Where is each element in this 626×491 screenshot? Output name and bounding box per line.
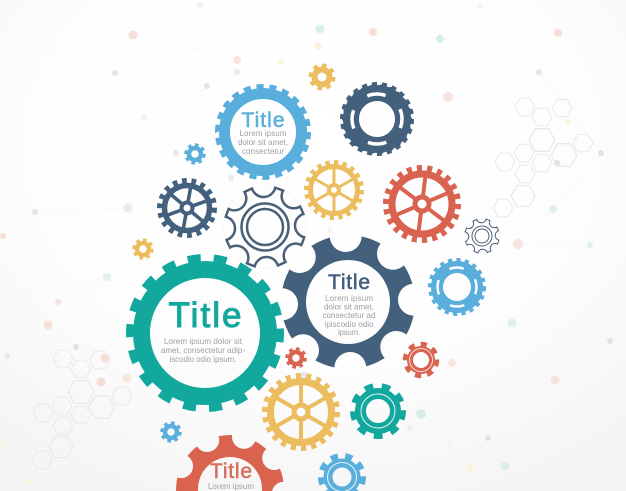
text: navy gear: consectetur ad bbox=[322, 311, 376, 320]
text: blue gear bbox=[238, 129, 288, 156]
text: navy gear: ipiscodio odio bbox=[324, 320, 374, 329]
gear: navy title bbox=[281, 235, 415, 369]
gear: blue slotted right bbox=[430, 260, 484, 314]
text: navy gear bbox=[322, 294, 376, 337]
gear: blue tiny bottom bbox=[162, 423, 180, 441]
text: navy gear: ipsum. bbox=[338, 328, 360, 337]
gear: red small right bbox=[405, 344, 437, 376]
gear: yellow tiny top bbox=[310, 66, 334, 88]
gear: yellow spoked bottom bbox=[266, 376, 336, 448]
text: navy gear: dolor sit amet, bbox=[324, 302, 374, 312]
gear: teal title bbox=[130, 258, 280, 408]
gear: blue title bbox=[218, 86, 308, 178]
text: navy gear: Lorem ipsum bbox=[325, 294, 373, 303]
gear: navy spoked bbox=[160, 181, 214, 235]
text: blue gear: consectetur bbox=[242, 147, 284, 156]
text: blue gear: Lorem ipsum bbox=[240, 129, 287, 138]
hexagon cluster right bbox=[493, 98, 593, 217]
title: navy gear: Title bbox=[328, 271, 370, 294]
gear: teal small bbox=[353, 386, 403, 436]
text: teal gear: amet, consectetur adip- bbox=[161, 346, 245, 355]
gear: blue bottom bbox=[321, 456, 363, 491]
title: red gear: Title bbox=[210, 460, 252, 483]
gear: outline large bbox=[223, 185, 307, 269]
gear: red spoked bbox=[386, 168, 458, 240]
text: red gear: Lorem ipsum bbox=[208, 482, 254, 491]
gear: red tiny bbox=[287, 349, 305, 367]
title: blue gear: Title bbox=[242, 109, 284, 132]
gear: yellow tiny left bbox=[134, 240, 152, 258]
gear: blue tiny bbox=[186, 145, 204, 163]
text: teal gear: iscodio odio ipsum. bbox=[170, 355, 236, 364]
text: blue gear: dolor sit amet, bbox=[238, 138, 288, 147]
title: teal gear: Title bbox=[168, 296, 242, 335]
text: teal gear: Lorem ipsum dolor sit bbox=[164, 337, 243, 346]
text: teal gear bbox=[161, 337, 245, 364]
gear: yellow spoked top bbox=[306, 162, 362, 218]
white slots bbox=[352, 94, 402, 144]
hexagon cluster left bbox=[32, 350, 132, 469]
gear: navy slotted top bbox=[342, 84, 412, 154]
gear: red title bbox=[176, 435, 284, 491]
gear: outline small bbox=[464, 218, 500, 254]
